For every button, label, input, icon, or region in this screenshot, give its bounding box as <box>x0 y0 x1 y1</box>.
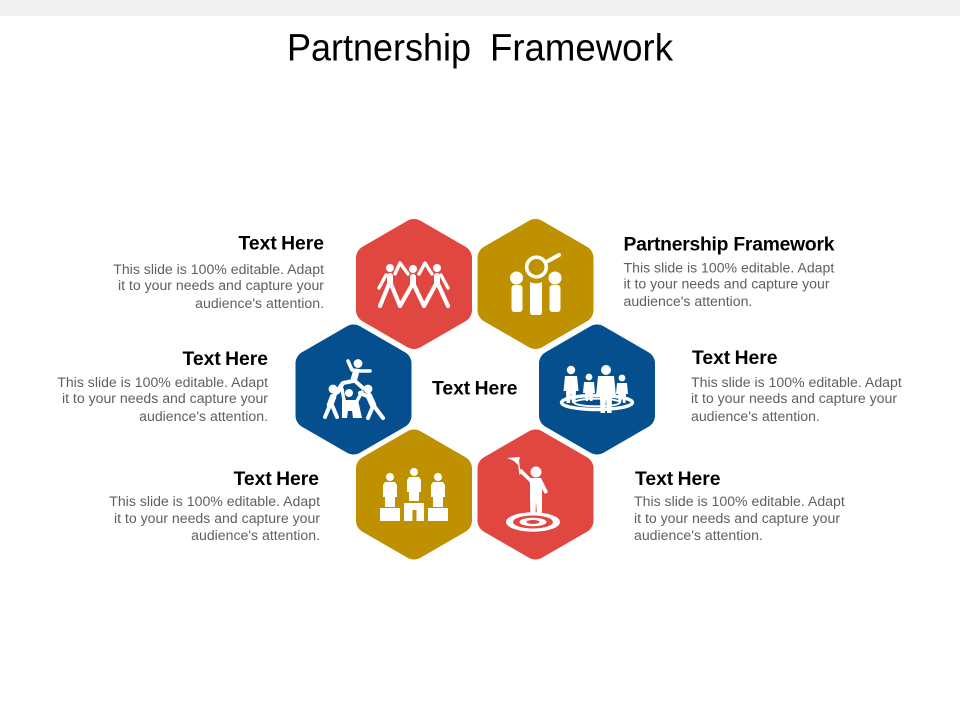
text block: top left: audience's attention. <box>195 295 324 311</box>
center label: Text Here <box>432 378 518 400</box>
text block: bottom left: it to your needs and capture your <box>114 510 320 526</box>
hexagon: middle left blue <box>308 338 398 442</box>
title: Framework <box>490 28 674 70</box>
text block: middle right: it to your needs and capture your <box>691 390 897 406</box>
text block: middle right: audience's attention. <box>691 408 820 424</box>
text block: top left: it to your needs and capture your <box>118 277 324 293</box>
text block: bottom left: Text Here <box>234 469 319 490</box>
icon: magnifier over three people <box>510 255 562 315</box>
text block: middle left <box>57 349 268 424</box>
hexagon: bottom right red <box>490 442 580 546</box>
text block: top right <box>624 234 835 309</box>
hexagon: top left red <box>369 232 459 336</box>
text block: middle right: This slide is 100% editable. Adapt <box>691 374 902 390</box>
icon: person with flag on target <box>506 457 560 532</box>
text block: bottom left <box>109 469 320 543</box>
text block: top right: it to your needs and capture your <box>624 276 830 292</box>
text block: middle left: it to your needs and capture your <box>62 390 268 406</box>
text block: middle right: Text Here <box>692 348 778 369</box>
text block: top right: Partnership Framework <box>624 234 835 256</box>
text block: middle left: Text Here <box>183 349 268 370</box>
icon: four people in rings <box>562 365 632 413</box>
title <box>287 28 674 70</box>
text block: middle left: audience's attention. <box>139 408 268 424</box>
hexagon: bottom left gold <box>369 442 459 546</box>
text block: bottom right: Text Here <box>635 469 721 490</box>
text block: bottom left: audience's attention. <box>191 527 320 543</box>
hexagon: top right gold <box>490 232 580 336</box>
text block: top left <box>113 234 324 311</box>
text block: middle left: This slide is 100% editable. Adapt <box>57 374 268 390</box>
text block: top right: audience's attention. <box>624 293 752 309</box>
text block: bottom right: This slide is 100% editable. Adapt <box>634 493 845 509</box>
text block: top right: This slide is 100% editable. Adapt <box>624 260 834 276</box>
text block: top left: This slide is 100% editable. Adapt <box>113 261 324 277</box>
text block: middle right <box>691 348 902 424</box>
icon: people climbing human pyramid <box>325 359 383 418</box>
title: Partnership <box>287 28 471 70</box>
top grey band <box>0 0 960 16</box>
text block: bottom right: it to your needs and capture your <box>634 510 840 526</box>
text block: bottom left: This slide is 100% editable. Adapt <box>109 493 320 509</box>
icon: linked team <box>379 263 448 306</box>
text block: bottom right <box>634 469 845 543</box>
text block: bottom right: audience's attention. <box>634 527 763 543</box>
text block: top left: Text Here <box>239 234 324 254</box>
icon: three people on podium <box>380 468 448 521</box>
hexagon: middle right blue <box>552 338 642 442</box>
